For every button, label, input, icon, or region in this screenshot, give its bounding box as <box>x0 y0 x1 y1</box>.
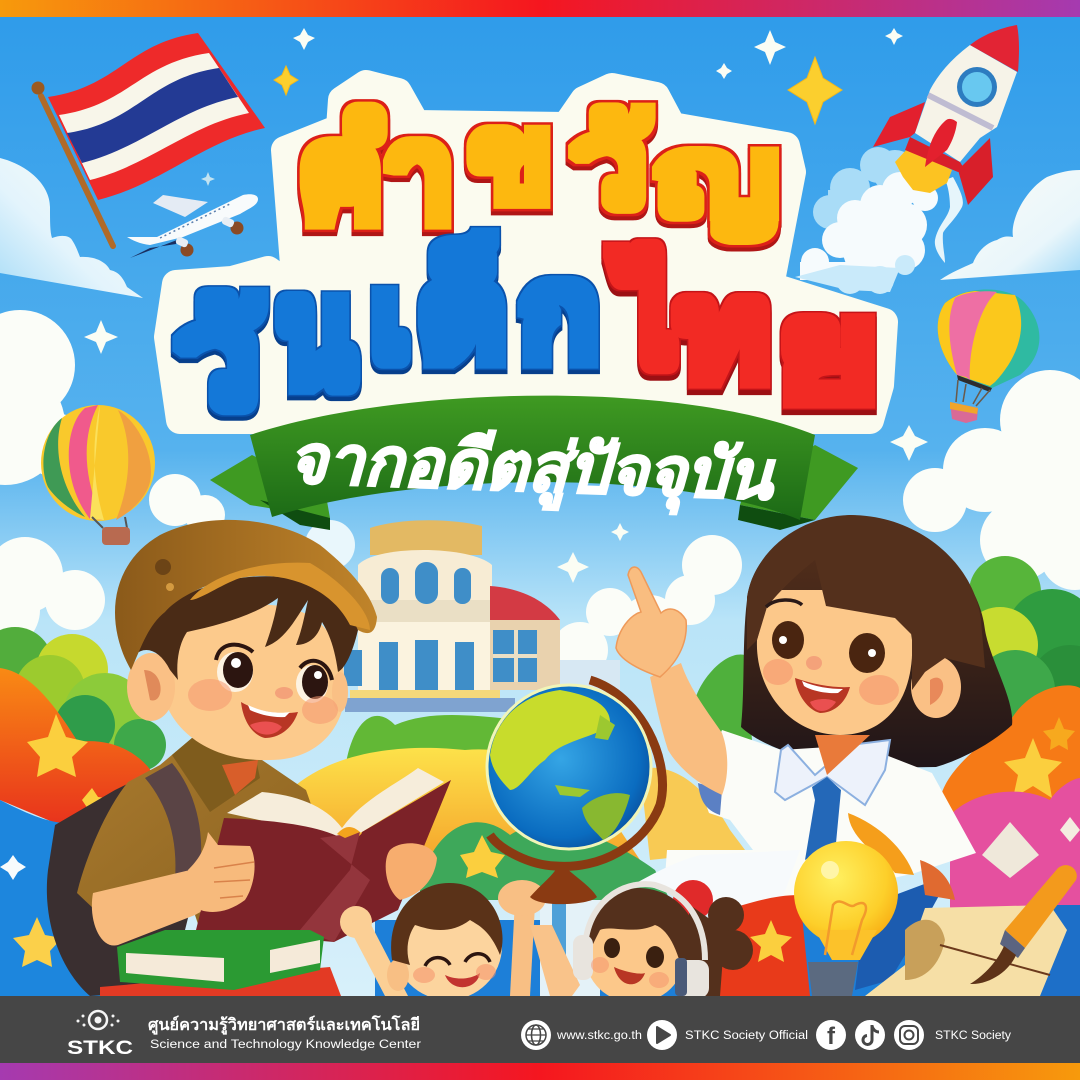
gold stars lower left <box>0 855 62 967</box>
hand: boy left <box>188 832 255 912</box>
hair back <box>741 515 1012 768</box>
social name: STKC Society <box>935 1030 1011 1042</box>
hand: boy right <box>386 843 437 900</box>
icon: airplane <box>127 194 258 258</box>
icon: open book <box>196 768 451 942</box>
hills: right greenery <box>695 556 1080 740</box>
hills: left greenery <box>0 627 560 771</box>
building <box>344 520 620 712</box>
icon: tiktok <box>855 1020 885 1050</box>
hills: left blue ground <box>0 800 140 996</box>
title: second line วันเด็ก: วั <box>176 282 262 434</box>
icon: instagram <box>894 1020 924 1050</box>
cheeks and nose <box>188 679 232 711</box>
panel: title sticker <box>168 84 884 420</box>
character: boy with book <box>47 520 377 996</box>
character: girl pointing <box>616 515 1012 920</box>
shirt <box>664 730 976 900</box>
title: second line วันเด็ก: น <box>278 249 354 417</box>
icon: hot air balloon right <box>938 290 1039 423</box>
face <box>757 590 912 735</box>
website address: www.stkc.go.th <box>556 1030 642 1042</box>
character: small boy cheering <box>340 880 546 1000</box>
icon: youtube play <box>647 1020 677 1050</box>
mouth <box>795 678 850 713</box>
gold stars <box>274 57 842 124</box>
bottom gradient bar <box>0 1063 1080 1080</box>
youtube name: STKC Society Official <box>685 1030 808 1042</box>
ribbon banner <box>210 396 858 530</box>
hills: central yellow and green <box>290 748 1000 996</box>
icon: hot air balloon left <box>41 405 155 545</box>
icon: orange shape and blue wrap <box>715 813 955 996</box>
title: second line วันเด็ก: ก <box>520 240 599 387</box>
icon: website <box>521 1020 551 1050</box>
icon: thailand flag <box>32 33 265 246</box>
cheeks and nose <box>763 659 793 685</box>
sparkles in the sky <box>84 28 928 583</box>
icon: globe <box>487 680 663 904</box>
neck and head <box>160 605 345 760</box>
hair <box>135 576 358 680</box>
icon: scroll and brush <box>865 865 1077 996</box>
title: second line วันเด็ก: เ <box>372 256 408 384</box>
icon: rocket with smoke <box>795 25 1019 294</box>
organisation name Thai: ศูนย์ความรู้วิทยาศาสตร์และเทคโนโลยี <box>148 1014 420 1036</box>
fringe and side hair <box>747 515 985 690</box>
clouds: upper left <box>0 158 143 298</box>
clouds: middle left <box>0 310 225 650</box>
subtitle: จากอดีตสู่ปัจจุบัน <box>287 421 776 518</box>
character: small girl with headphones <box>530 884 753 1003</box>
clouds: middle right <box>552 370 1080 678</box>
icon: facebook <box>816 1020 846 1050</box>
title: first line คำขวัญ <box>298 92 779 250</box>
eyes <box>217 652 328 703</box>
top gradient bar <box>0 0 1080 17</box>
icon: facebook: f <box>827 1023 836 1050</box>
title: first line คำขวัญ: คำ <box>298 98 455 250</box>
title: red word ไทย: ไ <box>610 246 676 392</box>
cap <box>115 520 377 670</box>
backpack <box>47 762 205 996</box>
hand <box>616 567 686 677</box>
title: first line คำขวัญ: ญ <box>655 119 779 239</box>
footer bar <box>0 996 1080 1063</box>
logo: STKC: STKC <box>67 1038 133 1059</box>
lap <box>638 850 800 905</box>
hills: left orange cloud with stars <box>0 668 152 825</box>
organisation name English: Science and Technology Knowledge Center <box>150 1039 421 1051</box>
mouth <box>241 702 298 738</box>
hills: right orange with star <box>940 685 1080 820</box>
arm <box>92 870 240 946</box>
logo: STKC <box>67 1011 133 1059</box>
eyes <box>772 621 885 673</box>
title: red word ไทย: ย <box>776 276 880 429</box>
arm <box>650 663 727 795</box>
icon: lightbulb <box>794 841 898 996</box>
title: second line วันเด็ก: ด็ <box>418 234 507 387</box>
title: first line คำขวัญ: ข <box>469 92 553 226</box>
title: red word ไทย <box>610 246 880 429</box>
title: second line วันเด็ก <box>176 234 599 434</box>
title: red word ไทย: ท <box>676 256 770 409</box>
title: first line คำขวัญ: วั <box>571 99 649 231</box>
icon: book stack <box>100 930 341 996</box>
hills: right pink with sparkles <box>950 778 1080 996</box>
clouds: upper right <box>940 170 1080 280</box>
clouds: centre behind building <box>305 520 355 570</box>
shirt <box>77 738 320 930</box>
